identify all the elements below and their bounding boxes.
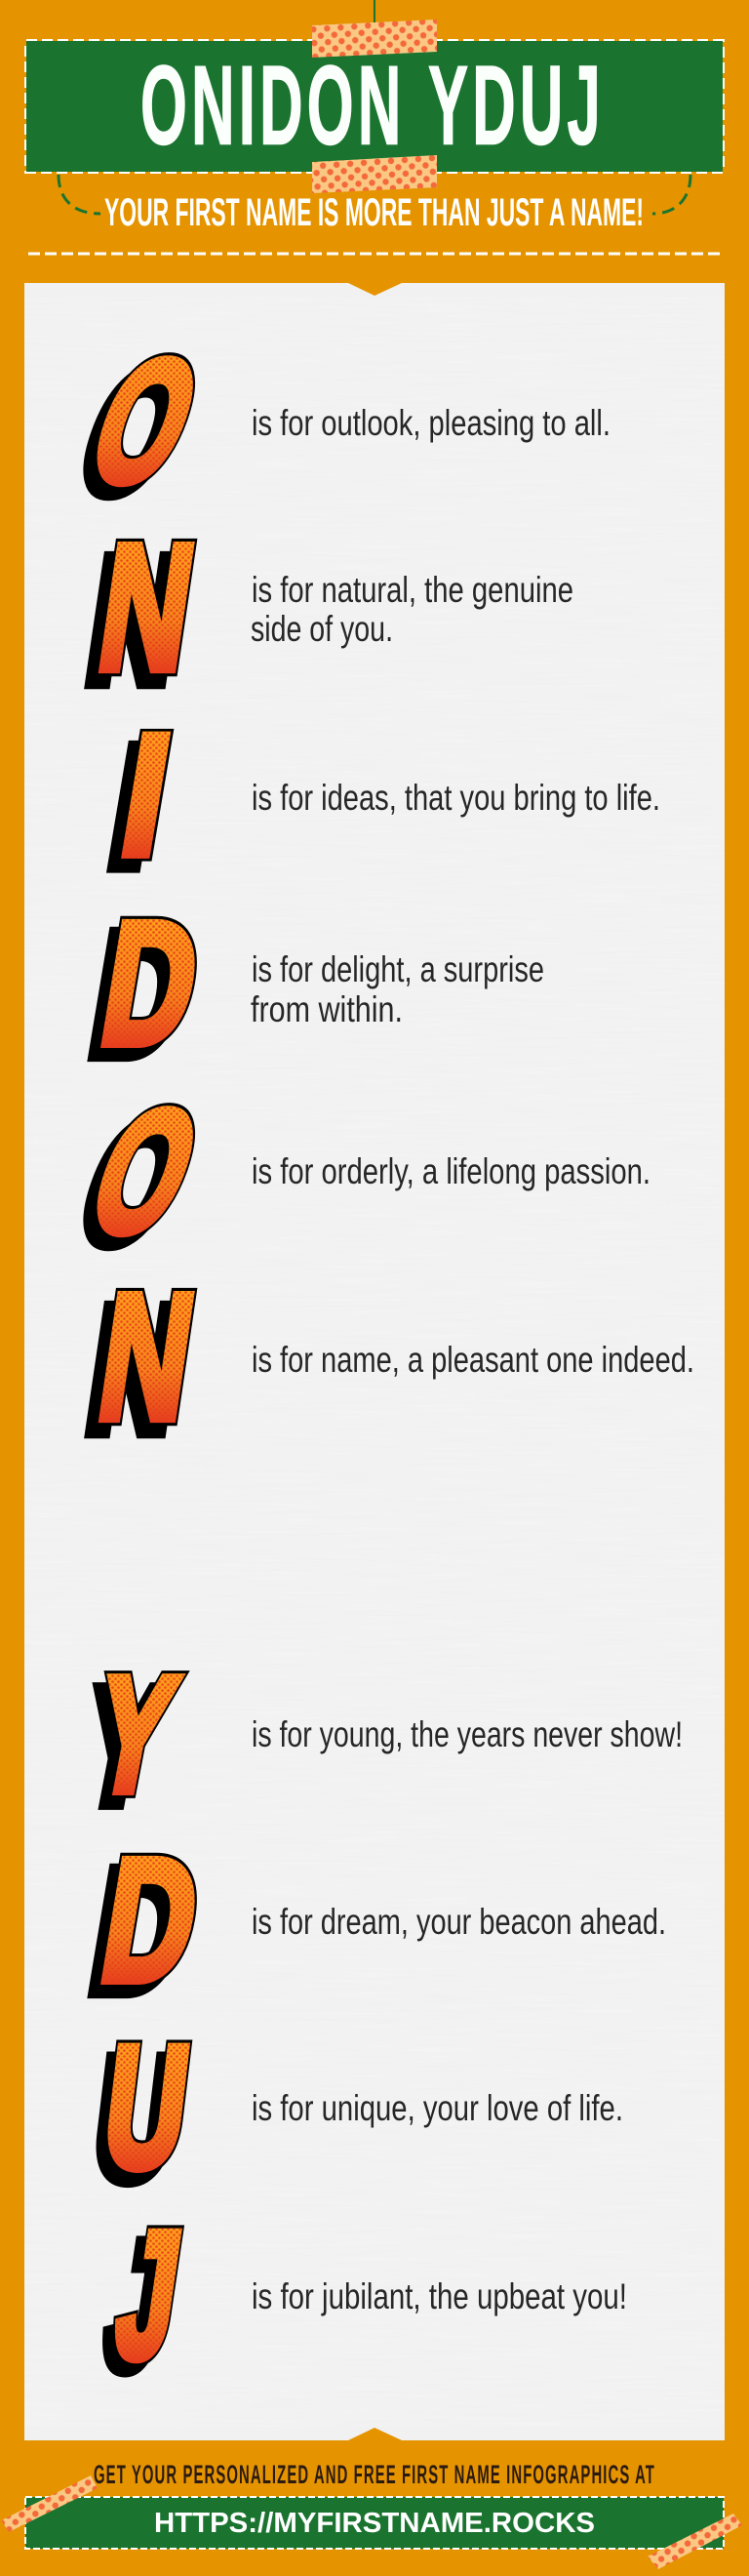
left dashed connector <box>59 175 100 214</box>
URL: HTTPS://MYFIRSTNAME.ROCKS <box>154 2508 595 2539</box>
letter I <box>106 728 174 873</box>
top tape <box>312 20 437 58</box>
text: O line: is for orderly, a lifelong passion. <box>252 1151 650 1191</box>
letter O: O <box>68 324 221 518</box>
hanging thread <box>374 0 375 24</box>
header banner <box>26 0 723 193</box>
letter O: O <box>57 1085 210 1279</box>
text: D lines <box>251 949 544 1029</box>
letter Y: Y <box>81 1644 188 1826</box>
text: N lines: is for natural, the genuine <box>252 570 573 610</box>
bottom tape <box>312 155 437 193</box>
letter I: I <box>105 695 187 895</box>
right tape <box>648 2514 742 2569</box>
footer banner <box>2 2475 742 2569</box>
letter J: J <box>96 2206 180 2405</box>
letter I: I <box>94 706 176 906</box>
letter D <box>87 1852 197 1998</box>
left tape <box>2 2475 98 2532</box>
text: J line: is for jubilant, the upbeat you! <box>252 2276 627 2316</box>
letter J: J <box>106 2195 191 2395</box>
letter N <box>84 539 197 689</box>
letter O <box>83 352 195 502</box>
green URL panel <box>25 2497 724 2549</box>
letter D <box>87 915 197 1062</box>
text: O line: is for outlook, pleasing to all. <box>252 403 611 443</box>
text: N lines <box>251 570 573 649</box>
letter O: O <box>68 1074 221 1268</box>
letter D: D <box>79 1834 200 2029</box>
green title panel <box>26 41 723 172</box>
text: U line: is for unique, your love of life. <box>252 2088 623 2128</box>
letter N: N <box>76 520 193 720</box>
letter N <box>84 1288 197 1438</box>
paper panel <box>24 283 725 2440</box>
letter O <box>83 1103 195 1251</box>
letter D: D <box>90 887 211 1081</box>
letter N: N <box>88 507 205 707</box>
text: N lines: side of you. <box>251 609 393 649</box>
letter N: N <box>76 1269 193 1469</box>
letter J <box>102 2225 185 2377</box>
letter D: D <box>79 898 200 1092</box>
letter O: O <box>57 335 210 529</box>
text: D lines: is for delight, a surprise <box>252 949 544 989</box>
letter N: N <box>88 1257 205 1457</box>
right dashed connector <box>652 175 690 214</box>
text: D lines: from within. <box>251 989 403 1029</box>
letter Y: Y <box>69 1656 177 1837</box>
letter U: U <box>96 2012 197 2203</box>
letter U: U <box>86 2024 187 2215</box>
letter Y <box>92 1670 190 1810</box>
letter D: D <box>90 1824 211 2018</box>
